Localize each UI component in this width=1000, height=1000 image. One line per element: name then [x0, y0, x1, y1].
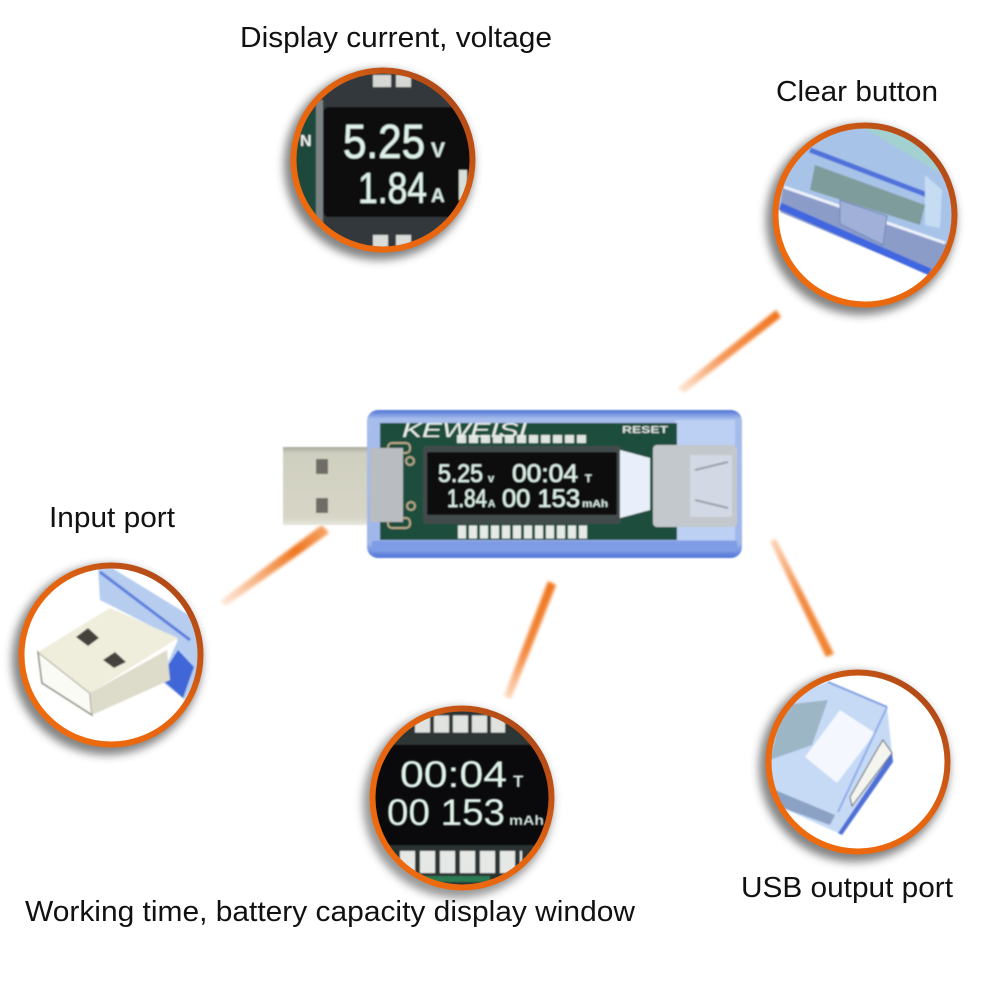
callout: time and capacity zoom: 00:04	[400, 754, 507, 795]
label: input port: Input port	[49, 502, 175, 534]
callout: time and capacity zoom: mAh	[509, 812, 544, 828]
brand: KEWEISI: KEWEISI	[402, 420, 528, 442]
solder pads left	[388, 443, 415, 528]
callout: time and capacity zoom: 00 153	[387, 792, 505, 833]
central device: USB tester	[283, 410, 742, 558]
LCD screen: A	[488, 499, 495, 510]
callout: time and capacity zoom	[363, 700, 560, 900]
callout: input port zoom	[12, 563, 205, 755]
LCD frame	[423, 446, 621, 524]
LCD screen: 5.25	[438, 460, 483, 488]
callout: voltage and current zoom	[284, 65, 480, 260]
callout: voltage and current zoom: A	[431, 186, 445, 207]
callout: time and capacity zoom: T	[513, 772, 524, 791]
arrow: to input port	[220, 525, 329, 606]
LCD screen	[427, 452, 617, 515]
label: clear button: Clear button	[776, 76, 938, 108]
label: USB output port: USB output port	[741, 872, 953, 904]
left metal collar	[370, 448, 403, 522]
arrow: to clear button	[678, 310, 781, 393]
callout: USB output port zoom	[759, 670, 950, 862]
LCD screen: 00 153	[502, 485, 580, 513]
arrow: to time and capacity window	[504, 581, 556, 699]
callout: voltage and current zoom: N	[300, 133, 312, 150]
callout: clear button zoom	[766, 120, 960, 315]
label: display current, voltage: Display current, voltage	[240, 22, 552, 54]
callout: voltage and current zoom: V	[431, 139, 445, 162]
white pads top	[457, 435, 587, 443]
arrow: to USB output port	[770, 539, 834, 657]
transparent blue case	[367, 410, 742, 558]
USB input plug	[283, 447, 373, 525]
reset label: RESET	[622, 425, 668, 436]
LCD screen: T	[585, 473, 592, 485]
green circuit board	[380, 423, 677, 540]
USB output port	[653, 445, 737, 527]
label: working time, battery capacity display window: Working time, battery capacity display window	[25, 896, 636, 928]
LCD screen: mAh	[582, 499, 608, 510]
LCD screen: 00:04	[512, 460, 578, 488]
LCD screen: v	[488, 473, 495, 485]
white LCD strip	[620, 450, 650, 518]
white pads bottom	[458, 526, 590, 538]
LCD screen: 1.84	[447, 485, 487, 513]
callout: voltage and current zoom: 1.84	[358, 164, 427, 213]
callout: voltage and current zoom: 5.25	[343, 116, 425, 169]
